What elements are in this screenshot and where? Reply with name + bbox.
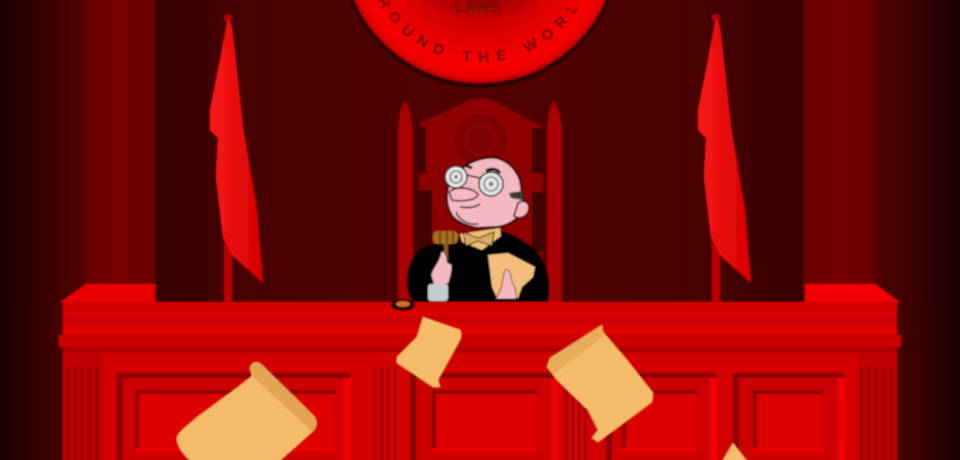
inner left column — [375, 367, 395, 460]
inner right column — [567, 367, 585, 460]
judge chair — [398, 99, 562, 305]
gavel — [433, 231, 458, 293]
scroll: center — [397, 317, 461, 387]
right flag — [698, 14, 751, 305]
collar — [460, 228, 501, 250]
eyebrows and mouth — [464, 165, 500, 173]
bow tie — [463, 232, 494, 246]
left bench top — [62, 284, 155, 303]
judge — [407, 158, 549, 302]
judge bench — [59, 284, 901, 460]
right glasses lens — [479, 172, 503, 196]
robe — [407, 230, 549, 302]
left column — [64, 353, 102, 460]
right pillar — [803, 0, 873, 290]
bench cornice — [63, 302, 897, 354]
head — [447, 158, 523, 228]
other hand — [495, 270, 516, 299]
bench face — [63, 353, 897, 460]
left pillar — [84, 0, 155, 290]
panel 1 — [117, 373, 351, 460]
panel 2 — [410, 373, 558, 460]
sleeve cuff — [428, 284, 448, 301]
scroll: bottom corner — [720, 443, 750, 460]
nose — [449, 188, 478, 201]
right column — [858, 353, 896, 460]
hand with gavel — [431, 251, 452, 285]
right bench top — [805, 284, 898, 303]
hair — [509, 191, 523, 200]
ear — [514, 201, 529, 218]
left glasses lens — [445, 166, 467, 188]
document in hand — [488, 253, 535, 298]
scroll: right — [547, 325, 653, 442]
left flag — [210, 14, 263, 305]
panel 4 — [733, 373, 845, 460]
seal: laws around the world — [350, 0, 610, 88]
scroll: bottom left — [177, 362, 316, 460]
gavel block — [391, 299, 415, 311]
panel 3 — [606, 373, 717, 460]
